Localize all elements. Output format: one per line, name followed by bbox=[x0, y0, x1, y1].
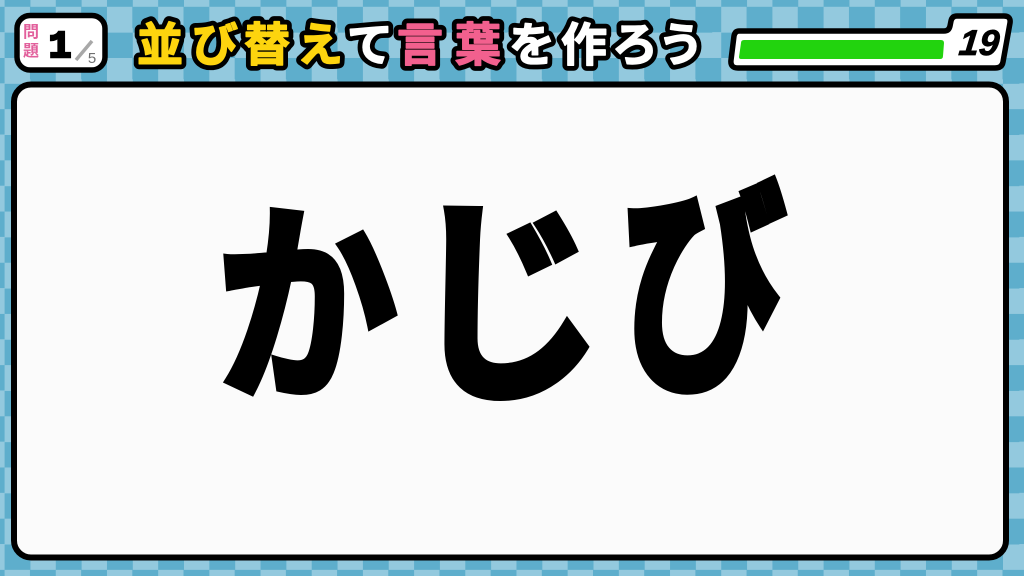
seconds remaining: 19 bbox=[957, 22, 1001, 63]
title: white words: を作ろう bbox=[509, 19, 704, 71]
title bbox=[137, 19, 704, 71]
letter ji: じ bbox=[410, 184, 604, 428]
label: question bbox=[23, 23, 39, 60]
letter ka: か bbox=[217, 190, 397, 427]
timer bar bbox=[731, 16, 1010, 68]
title: yellow words: 並び替え bbox=[137, 19, 343, 71]
title: pink word: 言葉 bbox=[397, 19, 501, 71]
question counter badge bbox=[17, 16, 105, 70]
scrambled word bbox=[217, 167, 787, 428]
question number: 1 bbox=[49, 26, 71, 69]
label: question: 問 bbox=[23, 23, 39, 41]
label: question: 題 bbox=[23, 42, 39, 60]
timer fill bbox=[739, 40, 944, 59]
title: white particle: て bbox=[347, 19, 393, 71]
total questions: 5 bbox=[88, 50, 96, 67]
main panel bbox=[14, 84, 1006, 558]
letter bi: び bbox=[620, 167, 787, 421]
title outline: 並び替えて言葉を作ろう bbox=[137, 19, 704, 71]
